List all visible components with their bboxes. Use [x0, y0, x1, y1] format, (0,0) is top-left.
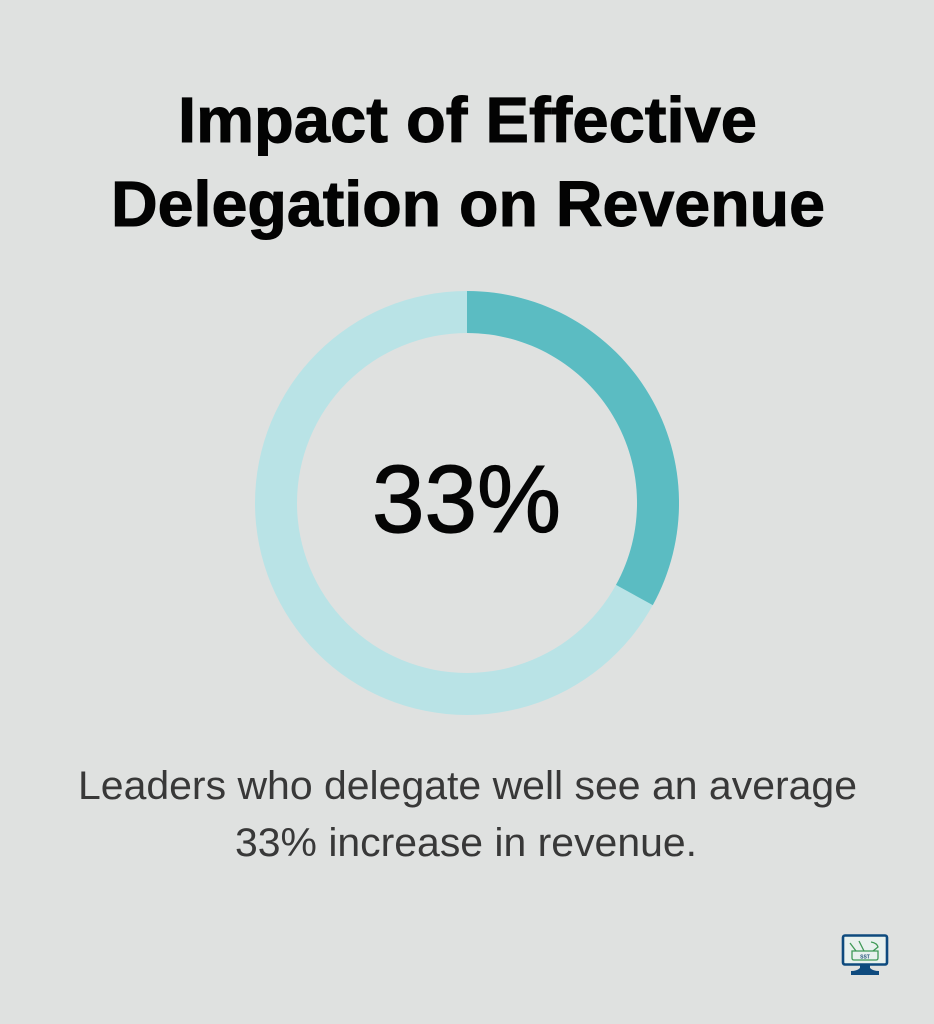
title: Delegation on Revenue: [111, 168, 825, 240]
monitor screen: [843, 936, 887, 964]
title: [111, 84, 825, 240]
title: Impact of Effective: [178, 84, 757, 156]
center value: 33%: [372, 446, 561, 553]
description text: 33% increase in revenue.: [235, 821, 697, 865]
toolbox: [850, 941, 878, 960]
toolbox label: SST: [860, 954, 870, 960]
donut remainder ring: [255, 291, 679, 715]
donut chart: 33%: [255, 291, 679, 715]
icon: computer monitor logo: [843, 936, 887, 975]
description text: Leaders who delegate well see an average: [78, 764, 857, 808]
donut highlighted segment: [467, 291, 679, 605]
description text: [78, 764, 857, 865]
monitor stand: [851, 964, 879, 975]
